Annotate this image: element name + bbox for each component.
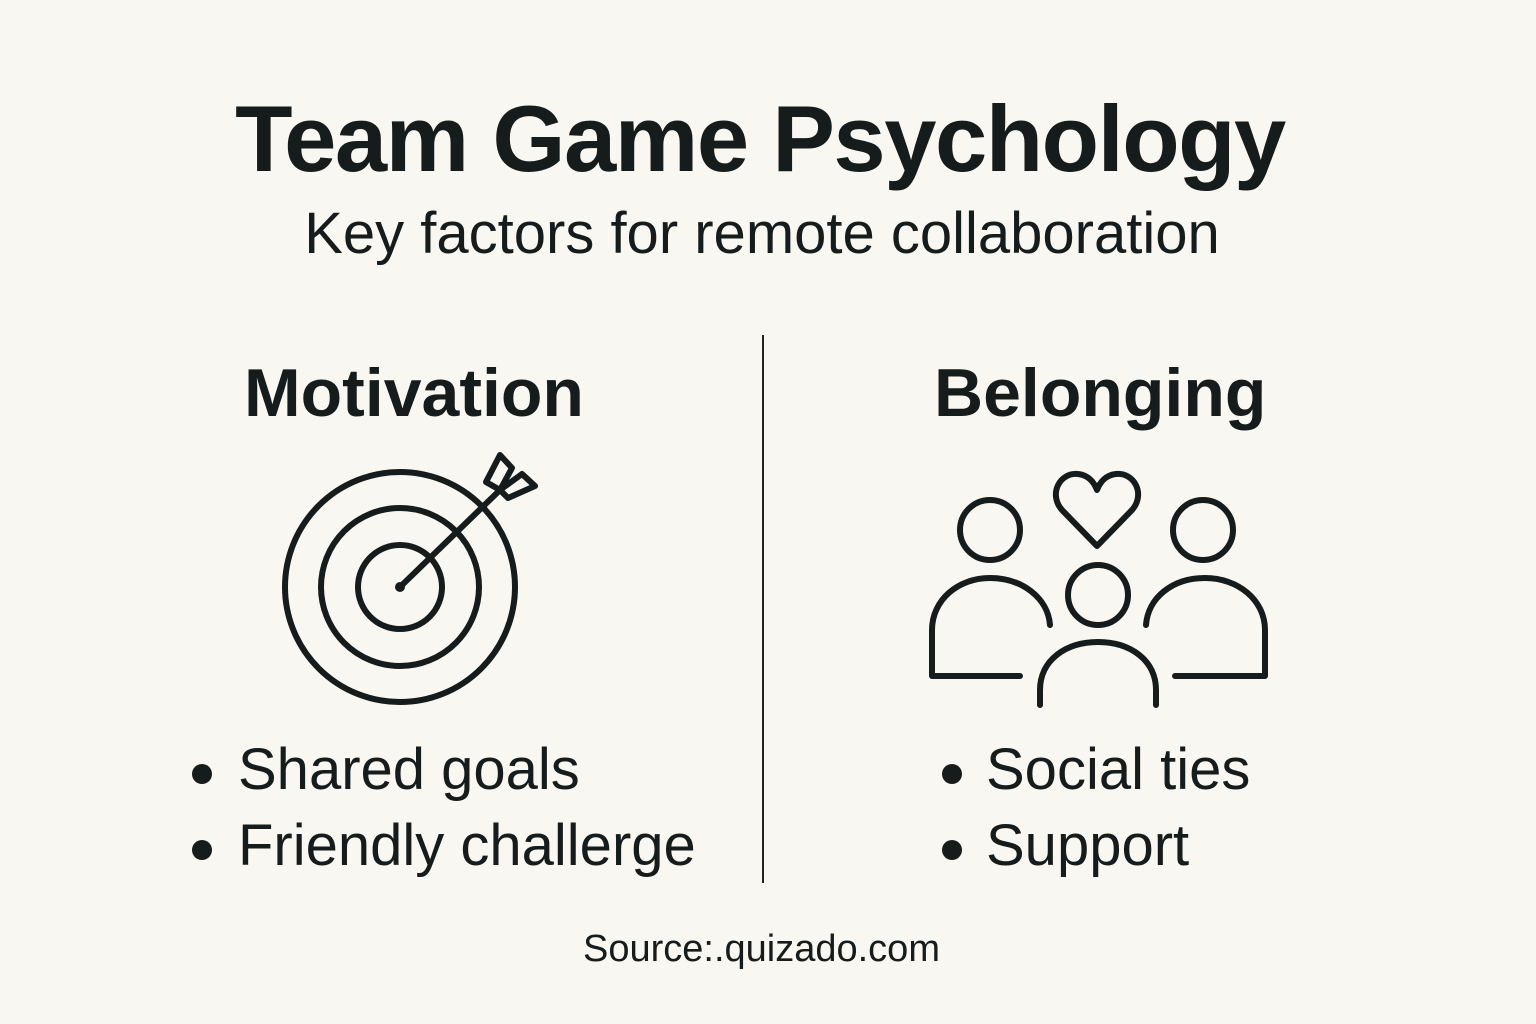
title: Team Game Psychology [235, 86, 1285, 191]
bullet list: belonging: Social ties [986, 737, 1250, 802]
panel: belonging [929, 355, 1268, 878]
panel: motivation [192, 355, 696, 878]
bullet list: motivation: Shared goals [238, 737, 580, 802]
source footer: Source:.quizado.com [583, 928, 940, 970]
heading: motivation: Motivation [244, 355, 584, 431]
heading: belonging: Belonging [934, 355, 1266, 431]
divider [762, 335, 764, 883]
bullet list: motivation [192, 737, 696, 878]
bullet list: motivation: Friendly challerge [238, 813, 696, 878]
bullet list: belonging: Support [986, 813, 1189, 878]
icon: target with arrow [282, 452, 538, 705]
subtitle: Key factors for remote collaboration [304, 201, 1220, 266]
icon: people with heart [929, 470, 1268, 708]
bullet list: belonging [942, 737, 1250, 878]
